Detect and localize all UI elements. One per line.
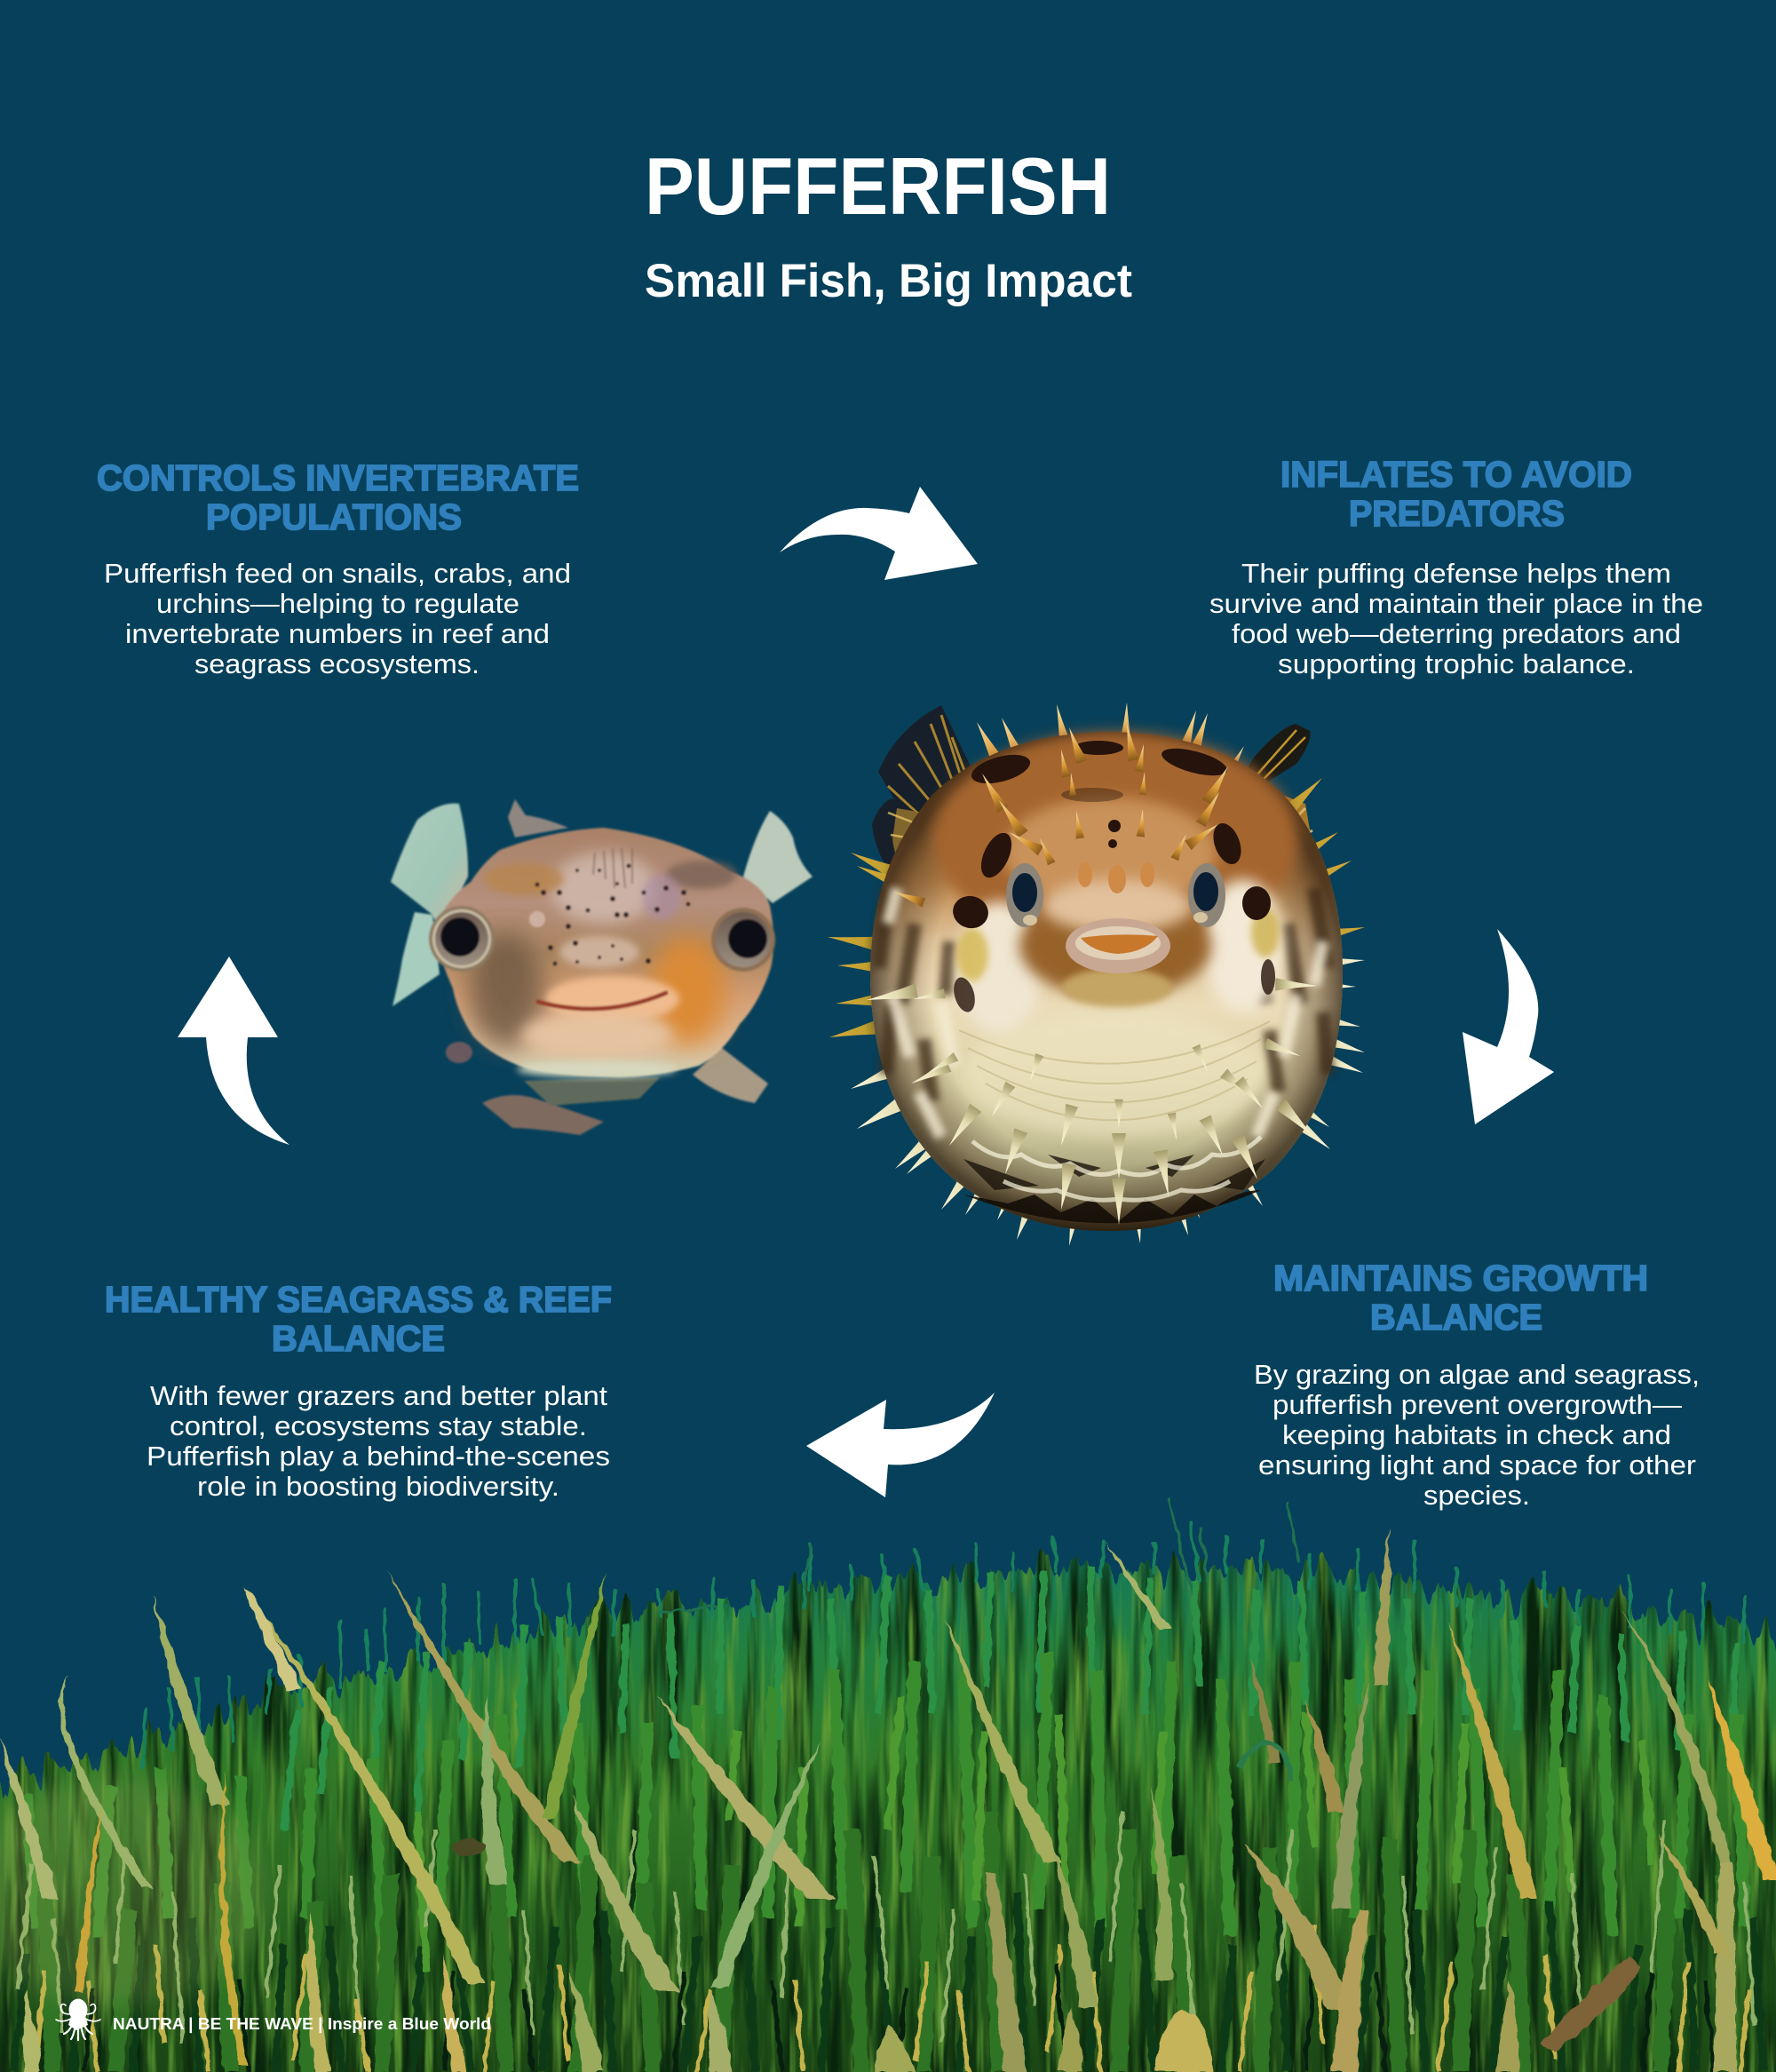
icon: octopus [56, 1998, 100, 2040]
inflated porcupine pufferfish [827, 703, 1368, 1247]
heading: MAINTAINS GROWTH [1273, 1258, 1648, 1298]
body text: food web—deterring predators and [1232, 619, 1681, 649]
body text: Their puffing defense helps them [1241, 559, 1671, 589]
heading [1280, 454, 1632, 534]
skin shading [469, 848, 737, 1077]
panel: inflates to avoid predators [1209, 454, 1703, 679]
heading [1273, 1258, 1648, 1338]
mouth [538, 993, 666, 1009]
body [432, 828, 773, 1077]
tan seagrass blades [0, 1528, 1776, 2072]
body text: role in boosting biodiversity. [197, 1472, 559, 1502]
panel: healthy seagrass and reef balance [105, 1279, 612, 1502]
body text [147, 1381, 610, 1502]
body text [1254, 1360, 1700, 1511]
panel: maintains growth balance [1254, 1258, 1700, 1511]
body text: pufferfish prevent overgrowth— [1273, 1390, 1683, 1420]
body text: With fewer grazers and better plant [150, 1381, 608, 1411]
body [870, 732, 1343, 1231]
footer text: NAUTRA | BE THE WAVE | Inspire a Blue World [113, 2015, 491, 2033]
heading: PREDATORS [1349, 493, 1565, 534]
heading: INFLATES TO AVOID [1280, 454, 1632, 495]
body text [1209, 559, 1703, 679]
body text: By grazing on algae and seagrass, [1254, 1360, 1700, 1390]
skin patches [879, 733, 1328, 1223]
footer logo and tagline [56, 1998, 491, 2040]
heading: CONTROLS INVERTEBRATE [97, 457, 579, 498]
body text [104, 559, 571, 679]
subtitle: Small Fish, Big Impact [645, 255, 1132, 307]
dark spots [949, 741, 1275, 1014]
seagrass meadow [0, 1499, 1776, 2072]
speckles [535, 863, 691, 966]
body text: keeping habitats in check and [1282, 1420, 1671, 1450]
deflated pufferfish [391, 799, 813, 1135]
fins [872, 705, 1319, 880]
title: PUFFERFISH [645, 142, 1111, 232]
eyes [1006, 863, 1225, 927]
body text: species. [1423, 1481, 1530, 1511]
body text: ensuring light and space for other [1258, 1450, 1696, 1481]
heading [97, 457, 579, 537]
arrow: left [178, 957, 289, 1145]
fins [391, 799, 813, 1135]
heading: POPULATIONS [206, 496, 462, 537]
heading: HEALTHY SEAGRASS & REEF [105, 1279, 612, 1320]
body text: survive and maintain their place in the [1209, 589, 1703, 619]
body text: Pufferfish play a behind-the-scenes [147, 1441, 610, 1472]
heading: BALANCE [1370, 1297, 1542, 1338]
mouth [1066, 918, 1170, 973]
arrow: bottom [806, 1393, 995, 1497]
arrow: right [1463, 929, 1554, 1124]
outer spikes [827, 703, 1368, 1247]
body text: invertebrate numbers in reef and [125, 619, 550, 649]
panel: controls invertebrate populations [97, 457, 579, 679]
body text: urchins—helping to regulate [156, 589, 519, 619]
face markings [1078, 862, 1154, 893]
heading [105, 1279, 612, 1359]
body text: seagrass ecosystems. [194, 649, 480, 679]
light haze on left meadow [0, 1776, 266, 2007]
heading: BALANCE [272, 1318, 445, 1359]
body text: Pufferfish feed on snails, crabs, and [104, 559, 571, 589]
body text: supporting trophic balance. [1278, 649, 1635, 679]
inner spikes [865, 723, 1319, 1225]
body text: control, ecosystems stay stable. [170, 1411, 587, 1441]
eyes [429, 906, 775, 972]
arrow: top [780, 487, 978, 580]
